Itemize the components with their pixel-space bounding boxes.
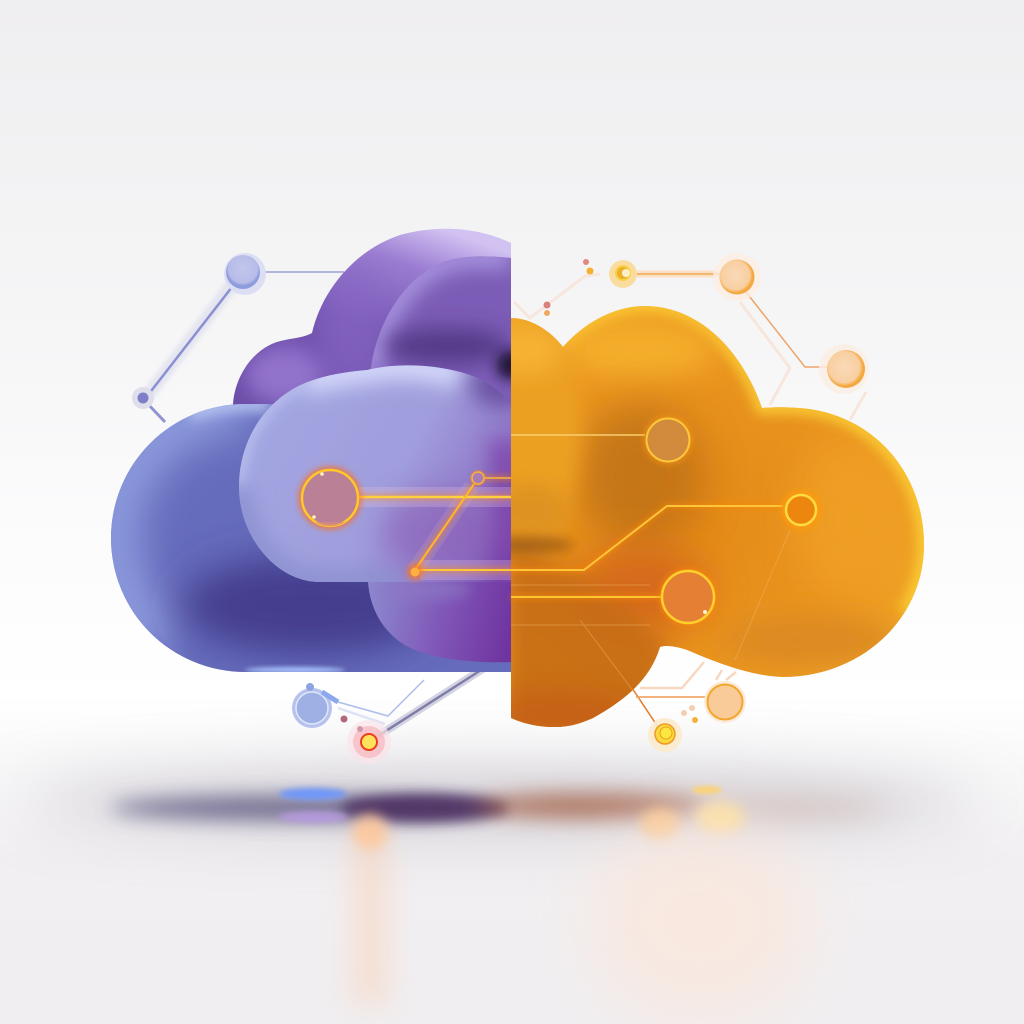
icon: small left joint [132,387,154,409]
upper lump [370,256,511,404]
circuit lines: upper right [514,253,869,420]
circuit lines: bottom right [632,662,746,752]
icon: upper left node [224,253,266,295]
icon: bottom right large node [704,681,746,723]
panel: left purple cloud half [105,225,530,680]
floor shadow and reflections [20,770,980,1020]
icon: small dots [340,716,363,732]
circuit node: upper orange ring [646,418,690,462]
orange base [505,300,930,735]
circuit node: glowing point [407,564,423,580]
circuit node: lower orange ring [662,571,714,623]
right lobe shading [807,442,912,574]
icon: bottom right small node [648,718,682,752]
bottom lobe [505,550,670,735]
icon: upper right large node [713,253,761,301]
translucent bands [358,497,511,570]
inner dark creases [575,403,705,547]
left lobe [513,318,585,502]
circuit lines: upper left [132,253,344,422]
blue base lobe [105,400,515,680]
panel: right orange cloud half [511,306,924,727]
circuit lines: bottom left [292,663,492,764]
circuit node: small junction [472,472,484,484]
icon: bottom left glowing node [347,720,391,764]
yellow rim [563,306,924,612]
icon: small dots [544,259,594,316]
illustration: split cloud with circuit nodes [0,228,1024,1024]
back purple lobes [233,228,511,404]
periwinkle middle lobe [239,365,511,582]
icon: small dots [681,705,698,723]
icon: far right node [819,344,869,394]
icon: upper right small node [609,260,637,288]
icon: bottom left blue node [292,683,338,728]
circuit traces on cloud [358,435,790,700]
lower lump [368,582,511,662]
circuit node: right orange ring [785,494,817,526]
circuit node: left glowing ring [302,470,358,526]
